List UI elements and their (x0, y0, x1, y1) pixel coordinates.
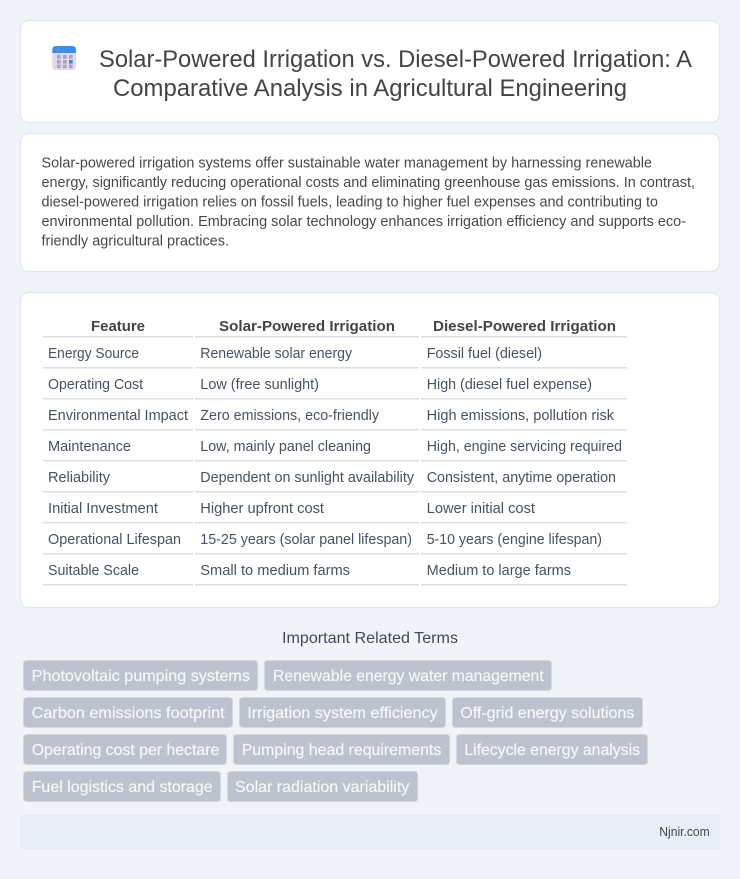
table header: Solar-Powered Irrigation (219, 318, 395, 335)
icon: calendar (52, 46, 76, 70)
tag: lifecycle energy analysis: Lifecycle energy analysis (464, 742, 640, 759)
title: Comparative Analysis in Agricultural Engineering (113, 75, 627, 102)
tag: off-grid energy solutions (452, 698, 642, 728)
row: energy source: Renewable solar energy (200, 346, 353, 362)
tag: pumping head requirements: Pumping head requirements (242, 742, 441, 759)
tag: irrigation system efficiency (240, 698, 446, 728)
tag: renewable energy water management (264, 660, 552, 690)
row: suitable scale: Suitable Scale (48, 563, 139, 579)
row: operating cost: Low (free sunlight) (200, 377, 319, 393)
row: environmental impact (43, 408, 627, 430)
table header (43, 318, 627, 338)
table header: Diesel-Powered Irrigation (433, 318, 616, 335)
tag: off-grid energy solutions: Off-grid energy solutions (460, 705, 634, 722)
tag: photovoltaic pumping systems (24, 660, 258, 690)
tag: operating cost per hectare (24, 734, 226, 764)
row: energy source: Fossil fuel (diesel) (427, 346, 542, 362)
row: operational lifespan: 15-25 years (solar panel lifespan) (200, 532, 412, 548)
tag: fuel logistics and storage (24, 772, 220, 802)
row: maintenance: High, engine servicing required (427, 439, 622, 455)
tag: solar radiation variability: Solar radiation variability (235, 779, 409, 796)
summary text (42, 156, 695, 250)
row: environmental impact: High emissions, pollution risk (427, 408, 615, 424)
tag: renewable energy water management: Renewable energy water management (273, 668, 544, 685)
row: operating cost: Operating Cost (48, 377, 143, 393)
row: environmental impact: Environmental Impact (48, 408, 188, 424)
panel: comparison table (20, 292, 720, 608)
row: reliability: Dependent on sunlight availability (200, 470, 415, 486)
tag: lifecycle energy analysis (456, 734, 648, 764)
summary text: friendly agricultural practices. (42, 234, 229, 250)
row: suitable scale: Medium to large farms (427, 563, 571, 579)
tag list (24, 660, 648, 802)
footer (20, 815, 720, 849)
tag: pumping head requirements (234, 734, 450, 764)
panel: header (20, 20, 720, 122)
summary text: Solar-powered irrigation systems offer sustainable water management by harnessing renewable (42, 156, 652, 172)
tag: photovoltaic pumping systems: Photovoltaic pumping systems (32, 668, 250, 685)
row: maintenance (43, 439, 627, 462)
row: operational lifespan: 5-10 years (engine lifespan) (427, 532, 602, 548)
panel: summary (20, 134, 720, 272)
row: reliability: Reliability (48, 470, 111, 486)
tag: carbon emissions footprint (24, 698, 232, 728)
row: initial investment (43, 501, 627, 524)
summary text: energy, significantly reducing operational costs and eliminating greenhouse gas emissions. In contrast, (42, 175, 695, 191)
row: reliability: Consistent, anytime operation (427, 470, 616, 486)
heading: important related terms: Important Related Terms (282, 630, 458, 647)
row: environmental impact: Zero emissions, eco-friendly (200, 408, 380, 424)
tag: irrigation system efficiency: Irrigation system efficiency (247, 705, 438, 722)
row: reliability (43, 470, 627, 492)
row: initial investment: Lower initial cost (427, 501, 535, 517)
tag: fuel logistics and storage: Fuel logistics and storage (32, 779, 213, 796)
row: operational lifespan: Operational Lifespan (48, 532, 181, 548)
footer: Njnir.com (659, 824, 710, 839)
table header: Feature (91, 318, 145, 335)
summary text: diesel-powered irrigation relies on fossil fuels, leading to higher fuel expenses and contributing to (42, 195, 658, 211)
summary text: environmental pollution. Embracing solar technology enhances irrigation efficiency and supports eco- (42, 214, 686, 230)
row: maintenance: Low, mainly panel cleaning (200, 439, 371, 455)
row: operating cost (43, 377, 627, 400)
title (99, 46, 692, 102)
row: suitable scale: Small to medium farms (200, 563, 350, 579)
tag: carbon emissions footprint: Carbon emissions footprint (32, 705, 225, 722)
title: Solar-Powered Irrigation vs. Diesel-Powered Irrigation: A (99, 46, 692, 73)
row: initial investment: Initial Investment (48, 501, 158, 517)
row: operating cost: High (diesel fuel expense) (427, 377, 592, 393)
row: maintenance: Maintenance (48, 439, 131, 455)
row: operational lifespan (43, 532, 627, 554)
row: initial investment: Higher upfront cost (200, 501, 324, 517)
row: energy source (43, 346, 627, 368)
row: energy source: Energy Source (48, 346, 139, 362)
tag: operating cost per hectare: Operating cost per hectare (32, 742, 219, 759)
row: suitable scale (43, 563, 627, 586)
tag: solar radiation variability (228, 772, 418, 802)
